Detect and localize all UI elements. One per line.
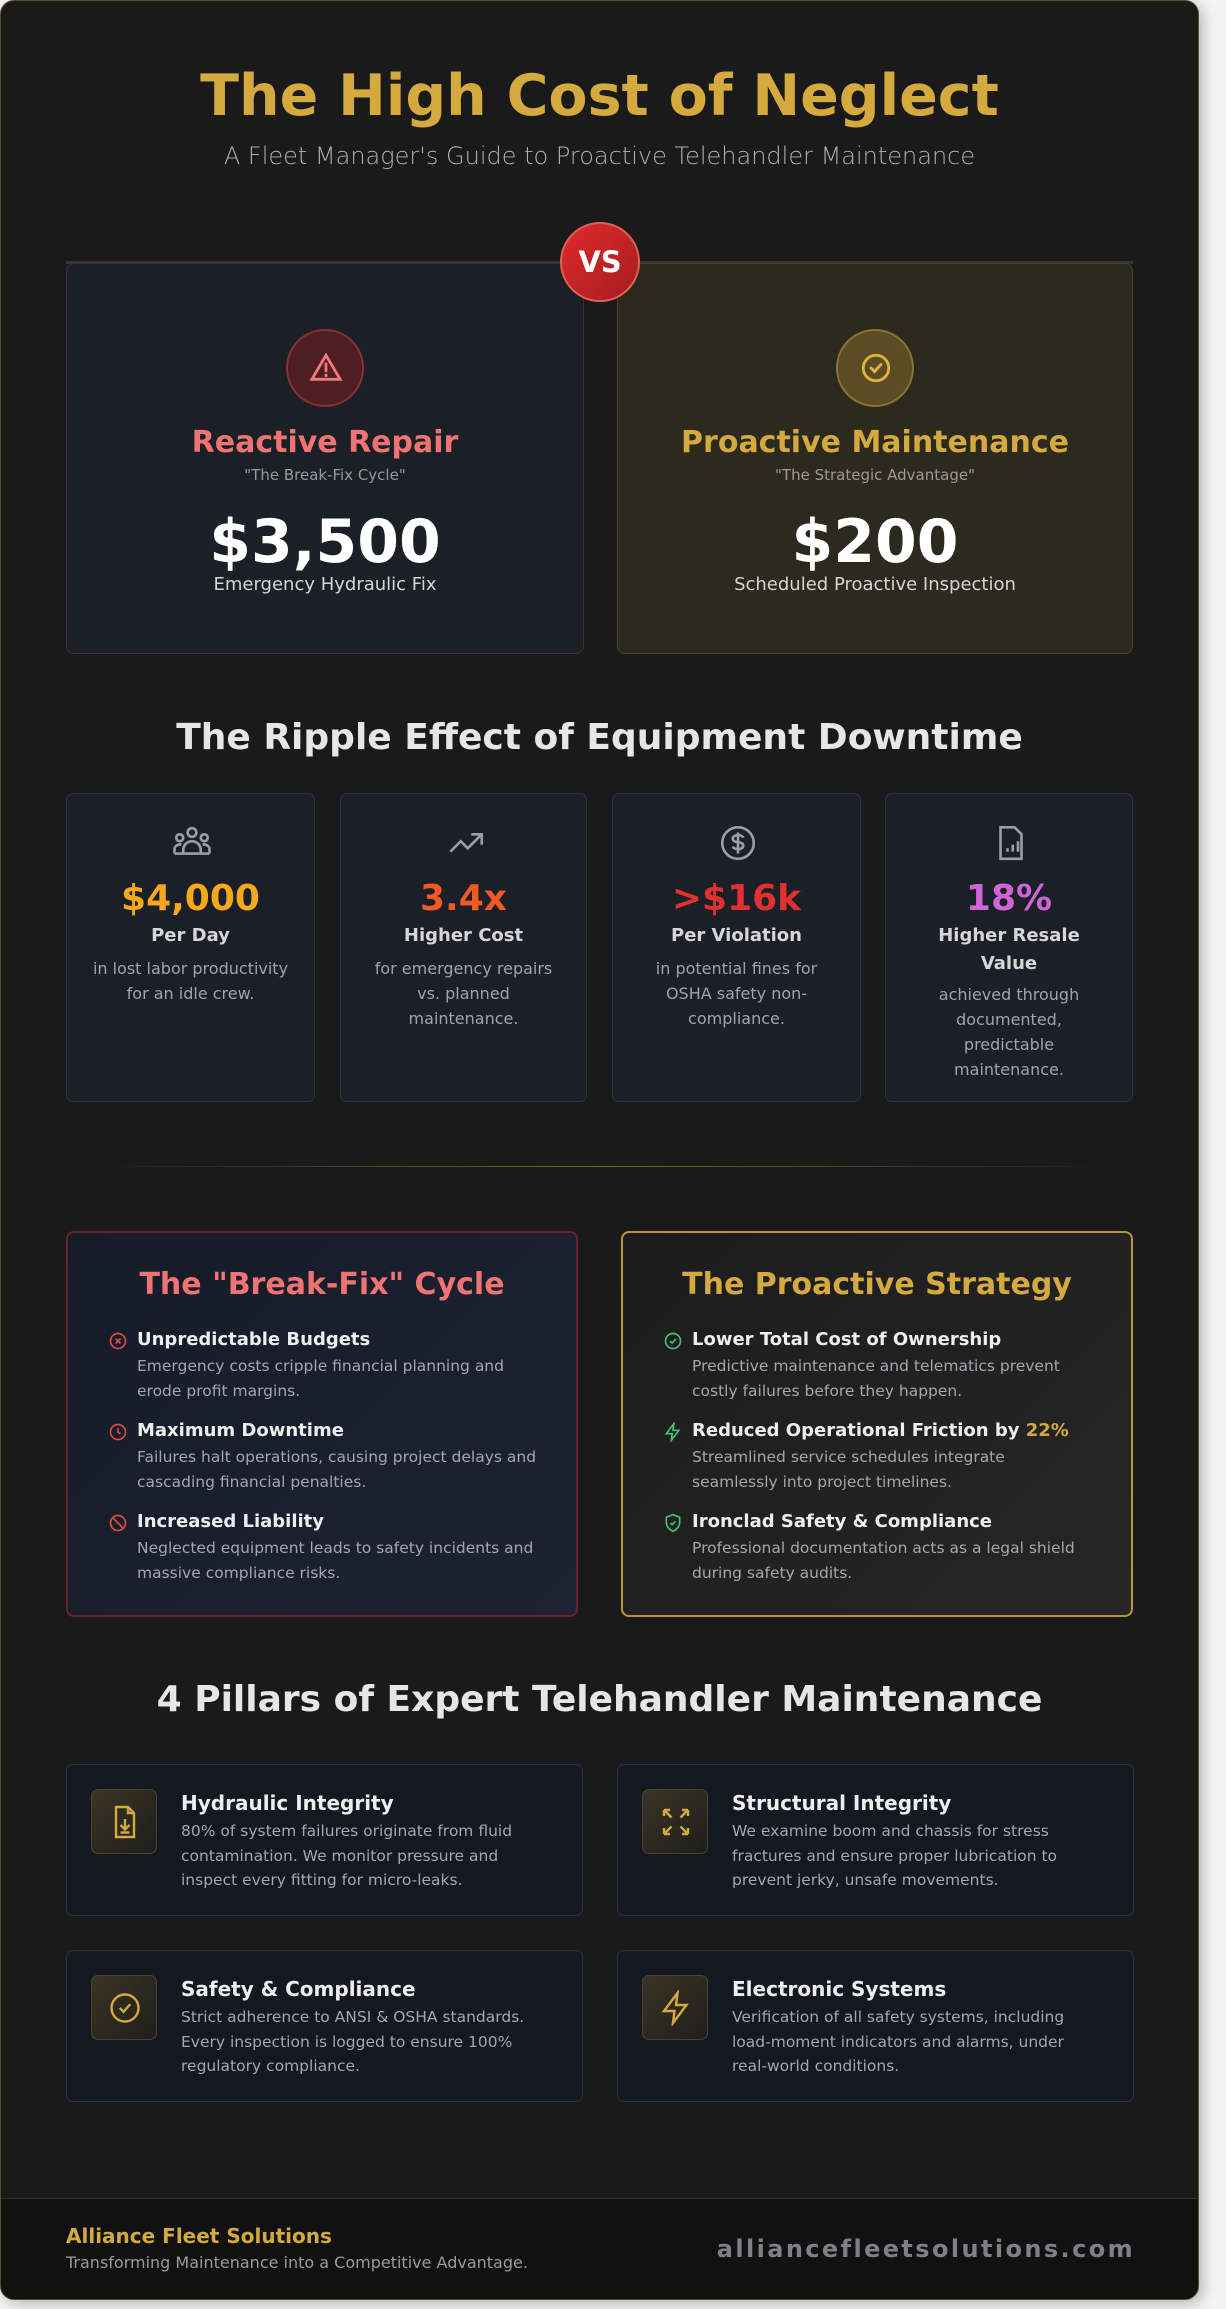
footer tagline: Transforming Maintenance into a Competitive Advantage. xyxy=(66,2253,528,2272)
stat card: resale xyxy=(885,793,1133,1102)
pillar: hydraulic: 80% of system failures originate from fluid contamination. We monitor pressure and inspect every fitting for micro-leaks. xyxy=(181,1822,512,1889)
pillar: structural xyxy=(617,1764,1134,1916)
item: downtime xyxy=(110,1420,536,1491)
item: TCO: Predictive maintenance and telematics prevent costly failures before they happen. xyxy=(692,1357,1060,1400)
item: TCO xyxy=(664,1329,1060,1400)
item: downtime: Failures halt operations, causing project delays and cascading financial penalties. xyxy=(137,1448,536,1491)
panel: reactive repair: Emergency Hydraulic Fix xyxy=(213,574,436,595)
pillar: electronic: Verification of all safety systems, including load-moment indicators and alarms, under real-world conditions. xyxy=(732,2008,1064,2075)
item: budgets: Unpredictable Budgets xyxy=(137,1329,370,1350)
heading: The Proactive Strategy xyxy=(682,1267,1072,1302)
stat card: violation: >$16k xyxy=(672,878,801,919)
stat card: per day: Per Day xyxy=(151,925,230,946)
stat card: resale: Higher Resale Value xyxy=(938,925,1080,974)
item: friction: Reduced Operational Friction by 22% xyxy=(692,1420,1069,1441)
stat: cost: $3,500 xyxy=(209,507,441,577)
title: The High Cost of Neglect xyxy=(200,63,999,129)
panel: reactive repair xyxy=(66,263,584,654)
pillar: electronic: Electronic Systems xyxy=(732,1977,946,2001)
icon: file download xyxy=(91,1789,157,1854)
icon: lightning xyxy=(642,1975,708,2040)
icon: warning xyxy=(286,329,364,407)
panel: reactive repair: "The Break-Fix Cycle" xyxy=(244,466,406,484)
heading: 4 pillars: 4 Pillars of Expert Telehandler Maintenance xyxy=(157,1679,1042,1720)
stat card: per day: $4,000 xyxy=(121,878,260,919)
pillar: hydraulic: Hydraulic Integrity xyxy=(181,1791,394,1815)
pillar: structural: We examine boom and chassis for stress fractures and ensure proper lubrication to prevent jerky, unsafe movements. xyxy=(732,1822,1057,1889)
pillar: safety: Safety & Compliance xyxy=(181,1977,416,2001)
panel: proactive maintenance: Scheduled Proactive Inspection xyxy=(734,574,1016,595)
icon: check xyxy=(836,329,914,407)
stat card: resale: achieved through documented, predictable maintenance. xyxy=(939,985,1079,1079)
stat card: higher cost xyxy=(340,793,587,1102)
heading: Proactive Maintenance xyxy=(681,425,1069,460)
stat card: resale: 18% xyxy=(966,878,1052,919)
item: friction: Streamlined service schedules integrate seamlessly into project timelines. xyxy=(692,1448,1005,1491)
item: budgets xyxy=(110,1329,504,1400)
panel: proactive maintenance xyxy=(617,263,1133,654)
item: friction xyxy=(664,1420,1069,1491)
stat card: higher cost: for emergency repairs vs. planned maintenance. xyxy=(375,959,552,1028)
pillar: safety: Strict adherence to ANSI & OSHA standards. Every inspection is logged to ensure 100% regulatory compliance. xyxy=(181,2008,524,2075)
item: budgets: Emergency costs cripple financial planning and erode profit margins. xyxy=(137,1357,504,1400)
pillar: electronic xyxy=(617,1950,1134,2102)
footer url: alliancefleetsolutions.com xyxy=(717,2235,1135,2263)
stat card: higher cost: 3.4x xyxy=(420,878,507,919)
stat card: violation xyxy=(612,793,861,1102)
pillar: structural: Structural Integrity xyxy=(732,1791,951,1815)
pillar: safety xyxy=(66,1950,583,2102)
subtitle: A Fleet Manager's Guide to Proactive Telehandler Maintenance xyxy=(224,142,975,170)
stat card: violation: Per Violation xyxy=(671,925,802,946)
footer brand: Alliance Fleet Solutions xyxy=(66,2224,332,2248)
item: liability: Neglected equipment leads to safety incidents and massive compliance risks. xyxy=(137,1539,533,1582)
panel: proactive maintenance: "The Strategic Advantage" xyxy=(775,466,975,484)
panel: proactive strategy xyxy=(621,1231,1133,1617)
item: safety xyxy=(666,1511,1075,1582)
stat card: higher cost: Higher Cost xyxy=(404,925,523,946)
heading: Reactive Repair xyxy=(192,425,458,460)
item: TCO: Lower Total Cost of Ownership xyxy=(692,1329,1001,1350)
stat card: per day: in lost labor productivity xyxy=(93,959,288,978)
stat card: violation: in potential fines for OSHA safety non-compliance. xyxy=(656,959,817,1028)
icon: expand arrows xyxy=(642,1789,708,1854)
pillar: hydraulic xyxy=(66,1764,583,1916)
item: downtime: Maximum Downtime xyxy=(137,1420,344,1441)
item: liability xyxy=(110,1511,533,1582)
stat: cost: $200 xyxy=(792,507,958,577)
heading: The "Break-Fix" Cycle xyxy=(139,1267,505,1302)
icon: VS badge xyxy=(560,222,640,302)
footer xyxy=(1,2198,1200,2303)
icon: check circle xyxy=(91,1975,157,2040)
stat card: per day xyxy=(66,793,315,1102)
heading: ripple effect: The Ripple Effect of Equipment Downtime xyxy=(176,717,1023,758)
panel: break-fix cycle xyxy=(66,1231,578,1617)
icon: VS badge: VS xyxy=(578,245,622,279)
item: safety: Professional documentation acts as a legal shield during safety audits. xyxy=(692,1539,1075,1582)
item: safety: Ironclad Safety & Compliance xyxy=(692,1511,992,1532)
item: liability: Increased Liability xyxy=(137,1511,324,1532)
stat card: per day: for an idle crew. xyxy=(127,984,254,1003)
